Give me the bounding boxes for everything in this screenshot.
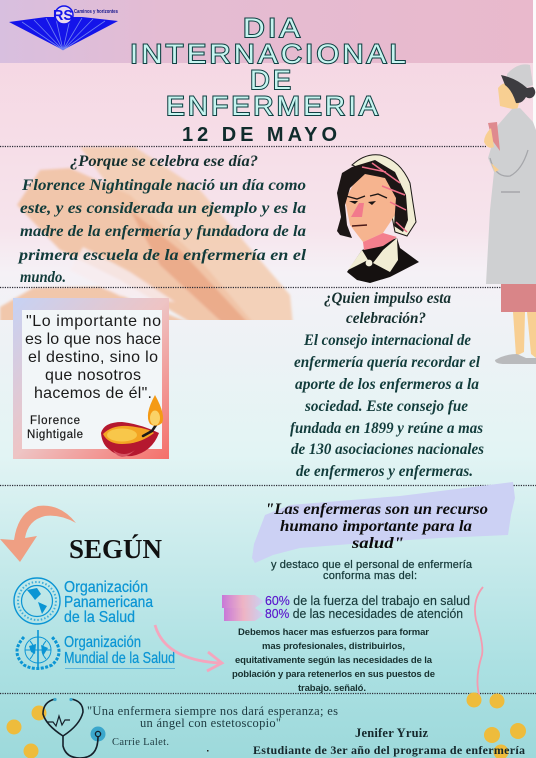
- heading quote: nurses are a resource: humano importante para la: [280, 518, 472, 535]
- bonnet: [352, 155, 416, 236]
- text block: who promoted the celebration: fundada en 1899 y reúne a mas: [290, 420, 483, 437]
- intro text: y destaco que el personal de enfermería: [271, 559, 473, 571]
- portrait: Florence Nightingale: [337, 155, 419, 283]
- quote text: [25, 313, 161, 402]
- footer quote: un ángel con estetoscopio": [140, 716, 281, 730]
- quote text: el destino, sino lo: [28, 349, 158, 366]
- quote card: [13, 298, 169, 459]
- title: DIA: [243, 13, 303, 43]
- quote author: [27, 415, 83, 441]
- text block: who promoted the celebration: [290, 290, 484, 480]
- statistic: 60 percent: 60% de la fuerza del trabajo en salud: [265, 593, 470, 608]
- arrow: pink curved: [155, 625, 222, 671]
- text block: call to action: trabajo. señaló.: [298, 683, 366, 694]
- text block: who promoted the celebration: El consejo internacional de: [303, 332, 471, 349]
- facial features: [346, 194, 387, 199]
- logo: Organización Panamericana de la Salud: Organización: [64, 579, 148, 596]
- quote author: Florence: [30, 415, 80, 427]
- title: INTERNACIONAL: [130, 39, 409, 69]
- nurse illustration: [484, 64, 536, 364]
- lavender brush highlight: [252, 482, 515, 563]
- quote text: es lo que nos hace: [25, 331, 161, 348]
- text block: who promoted the celebration: enfermería quería recordar el: [294, 354, 481, 371]
- title: [130, 13, 409, 121]
- icon: oil lamp: [101, 395, 163, 457]
- author credit: Estudiante de 3er año del programa de enfermería: [253, 743, 525, 757]
- text block: call to action: mas profesionales, distribuirlos,: [262, 641, 405, 652]
- logo: Organización Panamericana de la Salud: de la Salud: [64, 609, 135, 626]
- text block: why it is celebrated: este, y es considerada un ejemplo y es la: [20, 200, 306, 217]
- gold dots: [6, 692, 526, 758]
- text block: who promoted the celebration: de enfermeros y enfermeras.: [296, 463, 473, 480]
- quote text: que nosotros: [45, 367, 141, 384]
- logo: Caminos y horizontes: Caminos y horizontes: [74, 9, 118, 15]
- card interior: [22, 310, 162, 449]
- dress: [347, 238, 419, 283]
- neck: [363, 233, 397, 250]
- top colour band: [0, 0, 533, 63]
- text block: call to action: equitativamente según las necesidades de la: [235, 655, 433, 666]
- title: DE: [250, 65, 294, 95]
- logo: Caminos y horizontes: RS: [53, 7, 73, 24]
- quote text: hacemos de él".: [34, 385, 152, 402]
- author credit: Jenifer Yruiz: [355, 726, 428, 740]
- text block: who promoted the celebration: ¿Quien impulso esta: [324, 290, 451, 307]
- intro text: [271, 559, 473, 582]
- title: ENFERMERIA: [166, 91, 381, 121]
- white strip on right edge: [533, 0, 536, 285]
- text block: who promoted the celebration: aporte de los enfermeros a la: [295, 376, 479, 393]
- icon: stethoscope: [43, 698, 106, 758]
- logo: Caminos y horizontes: [9, 6, 118, 50]
- author credit: [253, 726, 525, 757]
- frame: [13, 298, 169, 459]
- text block: why it is celebrated: [17, 153, 307, 286]
- logo: Organización Mundial de la Salud: Organización: [64, 634, 141, 651]
- logo: Organización Mundial de la Salud: [17, 630, 175, 668]
- pink wavy line: [475, 587, 483, 698]
- quote text: "Lo importante no: [26, 313, 161, 330]
- heading quote: nurses are a resource: [265, 501, 488, 552]
- footer quote: Carrie Lalet.: [112, 737, 169, 748]
- heading quote: nurses are a resource: "Las enfermeras son un recurso: [265, 501, 488, 518]
- hair: [337, 160, 408, 238]
- logo: Organización Panamericana de la Salud: [14, 578, 153, 626]
- face: [345, 172, 397, 242]
- collar: [348, 238, 398, 272]
- text block: why it is celebrated: madre de la enfermería y fundadora de la: [20, 223, 306, 240]
- heading quote: nurses are a resource: salud": [351, 535, 404, 552]
- date: 12 DE MAYO: [182, 124, 337, 146]
- text block: why it is celebrated: ¿Porque se celebra ese día?: [70, 153, 258, 170]
- arrow: orange curved: [0, 506, 76, 562]
- text block: call to action: Debemos hacer mas esfuerzos para formar: [238, 627, 429, 638]
- heading: Según: SEGÚN: [69, 534, 162, 564]
- quote author: Nightigale: [27, 429, 83, 441]
- text block: why it is celebrated: mundo.: [20, 269, 66, 286]
- footer quote: "Una enfermera siempre nos dará esperanza; es: [87, 704, 338, 718]
- logo: Organización Panamericana de la Salud: Panamericana: [64, 594, 153, 611]
- text block: why it is celebrated: Florence Nightingale nació un día como: [21, 177, 306, 194]
- text block: why it is celebrated: primera escuela de la enfermería en el: [17, 247, 307, 264]
- text block: call to action: [232, 627, 435, 694]
- statistic: 80 percent: 80% de las necesidades de atención: [265, 606, 463, 621]
- section dividers: [0, 146, 536, 694]
- text block: who promoted the celebration: celebración?: [346, 310, 426, 327]
- text block: who promoted the celebration: sociedad. Este consejo fue: [304, 398, 468, 415]
- footer quote: [87, 704, 338, 748]
- text block: call to action: población y para retenerlos en sus puestos de: [232, 669, 435, 680]
- intro text: conforma mas del:: [323, 570, 417, 582]
- peach brush strokes: [0, 147, 293, 325]
- text block: who promoted the celebration: de 130 asociaciones nacionales: [291, 441, 484, 458]
- logo: Organización Mundial de la Salud: Mundial de la Salud: [64, 650, 175, 667]
